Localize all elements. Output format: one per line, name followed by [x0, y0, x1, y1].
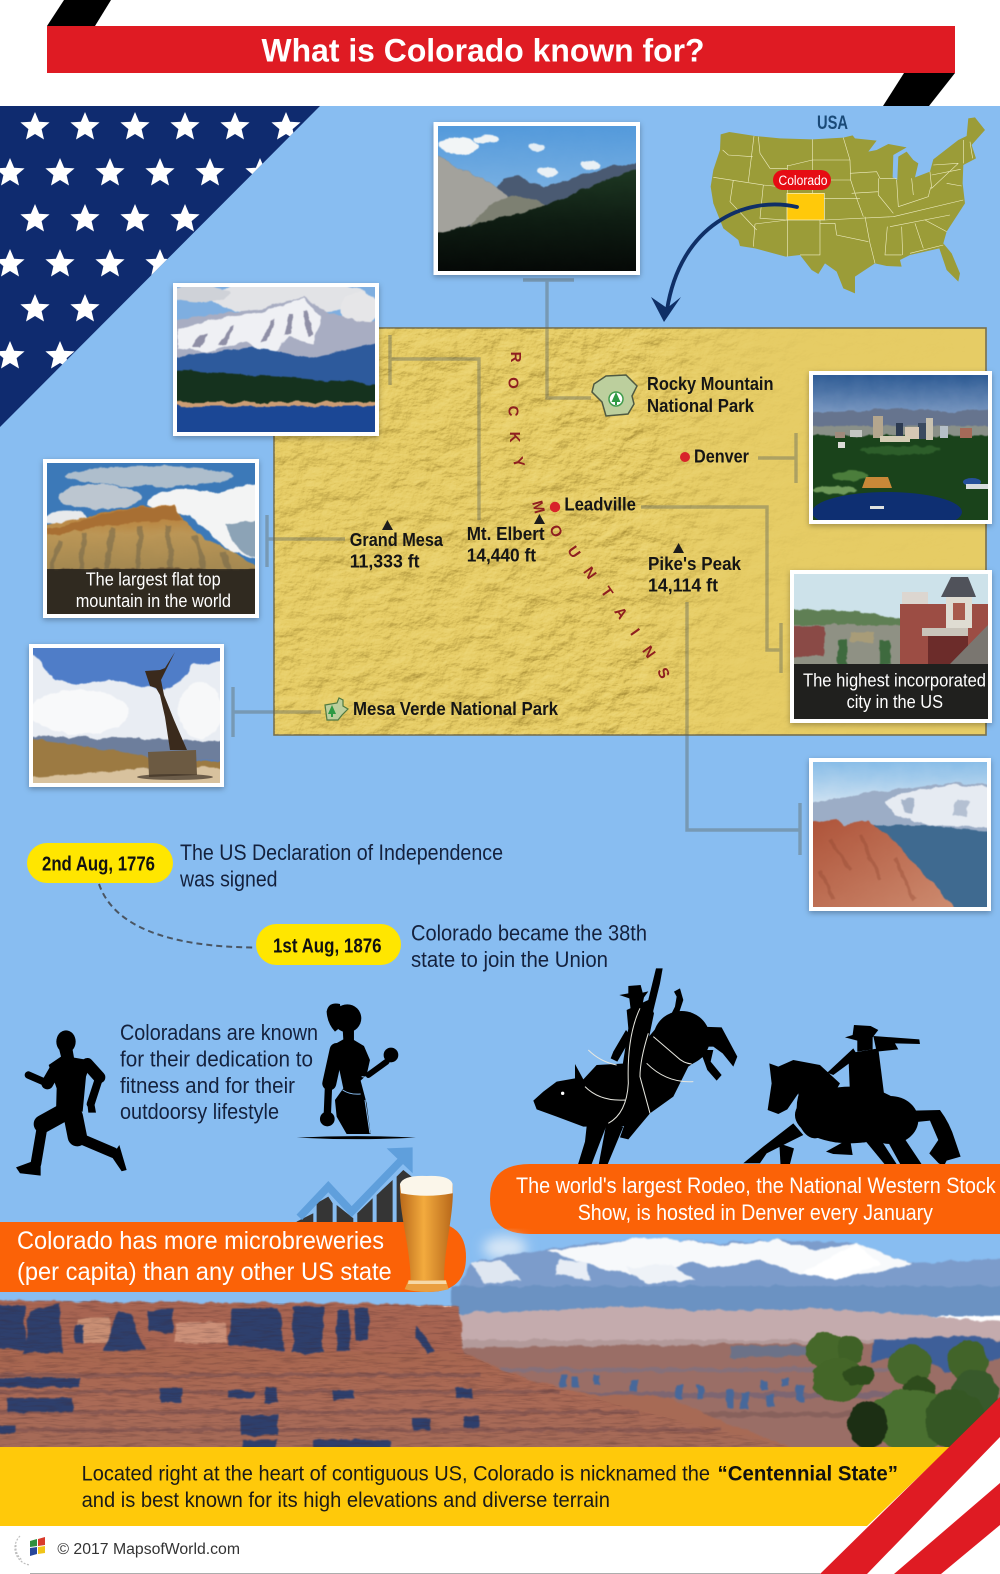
Rocky Mountains lettering: N	[639, 643, 659, 662]
Rocky Mountains lettering: T	[597, 584, 616, 601]
USA label: USA	[817, 113, 848, 134]
caption: The highest incorporated	[803, 671, 986, 691]
caption	[794, 664, 988, 719]
text: fitness	[120, 1020, 318, 1124]
label: Pike's Peak: 14,114 ft	[648, 576, 718, 596]
caption: city in the US	[847, 692, 943, 712]
label: Pike's Peak	[648, 543, 742, 596]
icon: runner	[16, 1030, 127, 1176]
caption: mountain in the world	[76, 591, 231, 611]
label: Mt. Elbert	[467, 514, 545, 566]
map labels	[325, 374, 774, 720]
banner: rodeo	[490, 1164, 1000, 1234]
snowy mountains	[450, 1237, 1000, 1460]
USA outline with states	[711, 117, 985, 293]
timeline: 1876: 1st Aug, 1876	[273, 936, 382, 958]
tree	[806, 1332, 999, 1450]
banner: microbreweries: Colorado has more microbreweries	[17, 1227, 384, 1255]
timeline: 1776: was signed	[179, 867, 278, 892]
Colorado highlight	[787, 193, 824, 220]
label: Rocky Mountain National Park: Rocky Mountain	[647, 374, 774, 394]
timeline: 1776: The US Declaration of Independence	[180, 840, 503, 865]
label: Rocky Mountain National Park	[592, 374, 774, 416]
connector lines	[233, 280, 800, 855]
photo: Pike's Peak	[806, 755, 994, 914]
banner: microbreweries: (per capita) than any other US state	[17, 1258, 392, 1286]
logo	[15, 1536, 45, 1565]
Rocky Mountains lettering: N	[580, 564, 600, 583]
photo: Mt. Elbert	[170, 280, 382, 440]
Rocky Mountains lettering: I	[626, 626, 643, 639]
arrow from USA to Colorado	[651, 204, 797, 322]
icon: growth chart	[297, 1147, 413, 1227]
logo and copyright: © 2017 MapsofWorld.com	[57, 1541, 240, 1558]
Rocky Mountains lettering: M	[528, 499, 548, 515]
label: Grand Mesa: 11,333 ft	[350, 552, 420, 572]
label: Rocky Mountain National Park: National Park	[647, 396, 755, 416]
timeline connector	[99, 884, 256, 948]
caption line 1: Located right at the heart of contiguous US, Colorado is nicknamed the	[82, 1463, 710, 1486]
Rocky Mountains lettering: O	[504, 377, 521, 389]
caption: The largest flat top	[86, 570, 221, 590]
Colorado label	[773, 170, 831, 190]
mesa	[0, 1298, 722, 1447]
photo: canyon landscape	[0, 1236, 1000, 1460]
Rocky Mountains lettering: U	[564, 543, 584, 562]
label: Mt. Elbert: 14,440 ft	[467, 546, 536, 566]
flag stars corner	[0, 106, 330, 431]
USA locator map	[711, 113, 985, 293]
Rocky Mountains lettering: C	[504, 406, 521, 417]
timeline: 1876: Colorado became the 38th	[411, 921, 647, 946]
Rocky Mountains lettering: S	[653, 665, 673, 681]
banner: microbreweries	[0, 1222, 466, 1292]
photo: Grand Mesa with caption	[40, 456, 262, 621]
photo: Rocky Mountain National Park	[430, 118, 644, 278]
photo: Denver	[806, 368, 996, 532]
timeline: 1776	[27, 840, 503, 892]
Rocky Mountains lettering: K	[506, 432, 523, 443]
label: Mt. Elbert: Mt. Elbert	[467, 524, 545, 544]
label: Mesa Verde National Park: Mesa Verde National Park	[353, 699, 559, 719]
label: Denver: Denver	[694, 447, 749, 467]
title banner	[47, 0, 955, 106]
label: Grand Mesa: Grand Mesa	[350, 530, 444, 550]
Rocky Mountains lettering	[504, 352, 673, 681]
Rocky Mountains lettering: A	[611, 604, 631, 623]
text: fitness: fitness and for their	[120, 1073, 295, 1098]
photo: Leadville with caption	[786, 570, 992, 723]
timeline: 1876: state to join the Union	[411, 947, 608, 972]
logo and copyright	[0, 1526, 1000, 1574]
Rocky Mountains lettering: Y	[509, 455, 528, 469]
text: fitness: outdoorsy lifestyle	[120, 1099, 279, 1124]
sky background	[0, 106, 1000, 1306]
icon: woman with dumbbells	[297, 1004, 416, 1139]
timeline: 1776: 2nd Aug, 1776	[42, 854, 155, 876]
photo: Mesa Verde	[26, 641, 226, 787]
timeline: 1876	[256, 921, 647, 972]
Rocky Mountains lettering: O	[545, 522, 566, 541]
icon: rodeo bull and rider	[533, 968, 737, 1167]
label: Pike's Peak: Pike's Peak	[648, 554, 742, 574]
caption emphasis: “Centennial State”	[718, 1463, 898, 1486]
caption	[47, 569, 255, 614]
text: fitness: for their dedication to	[120, 1047, 313, 1072]
label: Leadville: Leadville	[564, 495, 636, 515]
red and white corner stripes	[820, 1397, 1000, 1574]
caption line 2: and is best known for its high elevations and diverse terrain	[82, 1489, 610, 1512]
colorado map with relief	[274, 328, 986, 735]
label: Grand Mesa	[350, 520, 444, 572]
icon: beer glass	[400, 1176, 453, 1292]
icon: horse and rider	[743, 1025, 961, 1167]
Rocky Mountains lettering: R	[507, 352, 524, 363]
text: fitness: Coloradans are known	[120, 1020, 318, 1045]
banner: rodeo: Show, is hosted in Denver every January	[578, 1200, 933, 1225]
footer strip: yellow band	[0, 1447, 950, 1526]
title: What is Colorado known for?	[262, 32, 704, 68]
Colorado label: Colorado	[778, 173, 828, 188]
